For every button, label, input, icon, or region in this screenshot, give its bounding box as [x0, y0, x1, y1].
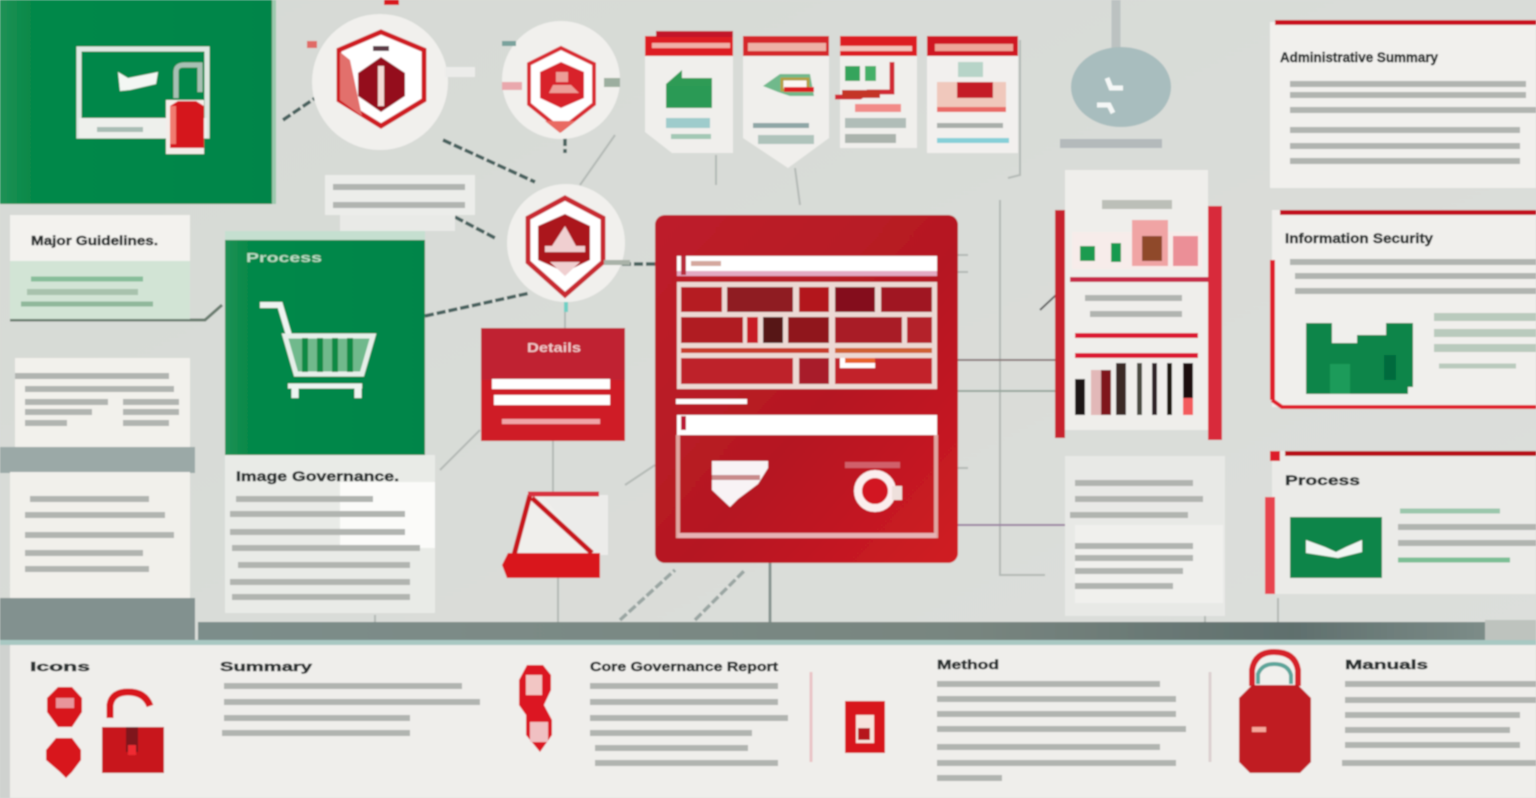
panel: central red dashboard	[655, 215, 958, 563]
separator	[810, 672, 812, 762]
text block: manuals	[1342, 657, 1536, 763]
icon: white ticket	[712, 461, 768, 507]
heading: Major Guidelines.	[31, 233, 158, 248]
panel: gray band bottom left	[0, 598, 195, 641]
heading: Process	[246, 250, 322, 265]
circle caption	[1060, 139, 1162, 148]
top white search bar	[677, 256, 937, 276]
connector lines	[10, 0, 1278, 640]
icon: small red pins	[46, 687, 82, 778]
text block: core report: Core Governance Report	[590, 659, 779, 674]
text block: summary: Summary	[220, 659, 313, 674]
panel: gray band behind lower card	[0, 447, 195, 473]
panel: bottom strip	[0, 645, 1536, 798]
panel: red details box	[481, 328, 625, 441]
panel: right process panel	[1265, 451, 1536, 594]
text block: method	[937, 657, 1186, 778]
card one	[645, 31, 733, 153]
panel: right summary top	[1270, 20, 1536, 188]
text block: summary	[220, 659, 480, 733]
text block: core report	[590, 659, 788, 763]
icon: mini tile row	[1072, 220, 1202, 269]
panel: right chart panel	[1270, 210, 1536, 407]
icon: green mail tile	[1290, 517, 1382, 578]
panel: lower right column text	[1065, 456, 1225, 616]
panel: green cart panel	[225, 231, 425, 455]
icon: red tip top	[384, 0, 399, 5]
heading: Process	[1285, 472, 1360, 488]
lower label	[676, 399, 747, 404]
card two	[743, 36, 829, 168]
icon: red padlock	[1239, 652, 1311, 773]
icon: hang tags	[519, 665, 552, 752]
panel: left list card	[15, 358, 190, 448]
panel: four top cards	[645, 31, 1018, 168]
callout: small text box	[325, 175, 475, 231]
heading: Administrative Summary	[1280, 49, 1438, 65]
icon: red circle badge	[845, 462, 902, 508]
icon: shield two	[502, 21, 620, 139]
icon: red square tile	[845, 701, 885, 753]
text block: manuals: Manuals	[1345, 657, 1428, 672]
separator	[1208, 672, 1212, 762]
card three	[835, 36, 917, 148]
panel: right mini report column	[1055, 170, 1222, 440]
barcode chart	[1075, 363, 1193, 415]
icon: shield one	[307, 14, 475, 150]
icon: open padlock	[102, 692, 164, 773]
icon: monitor with tag	[79, 49, 207, 154]
icon: shopping cart	[260, 305, 373, 398]
text block: method: Method	[937, 657, 999, 672]
icon: green bar block	[1306, 323, 1413, 394]
heading: Image Governance.	[236, 468, 399, 484]
card four	[927, 36, 1018, 153]
icon: red triangle warning	[502, 492, 608, 578]
heading: icons: Icons	[30, 659, 90, 674]
panel: top left green monitor	[0, 0, 276, 204]
heading: Information Security	[1285, 230, 1433, 246]
bottom band	[0, 620, 1536, 645]
heading: Details	[527, 340, 581, 355]
panel: major guidelines card	[10, 215, 190, 319]
icon: gray circle badge	[1060, 47, 1171, 148]
data grid	[677, 282, 937, 389]
panel: image governance text	[225, 455, 435, 613]
panel: left text card	[10, 472, 190, 599]
icon: shield three	[507, 184, 630, 312]
lower form	[677, 415, 937, 538]
